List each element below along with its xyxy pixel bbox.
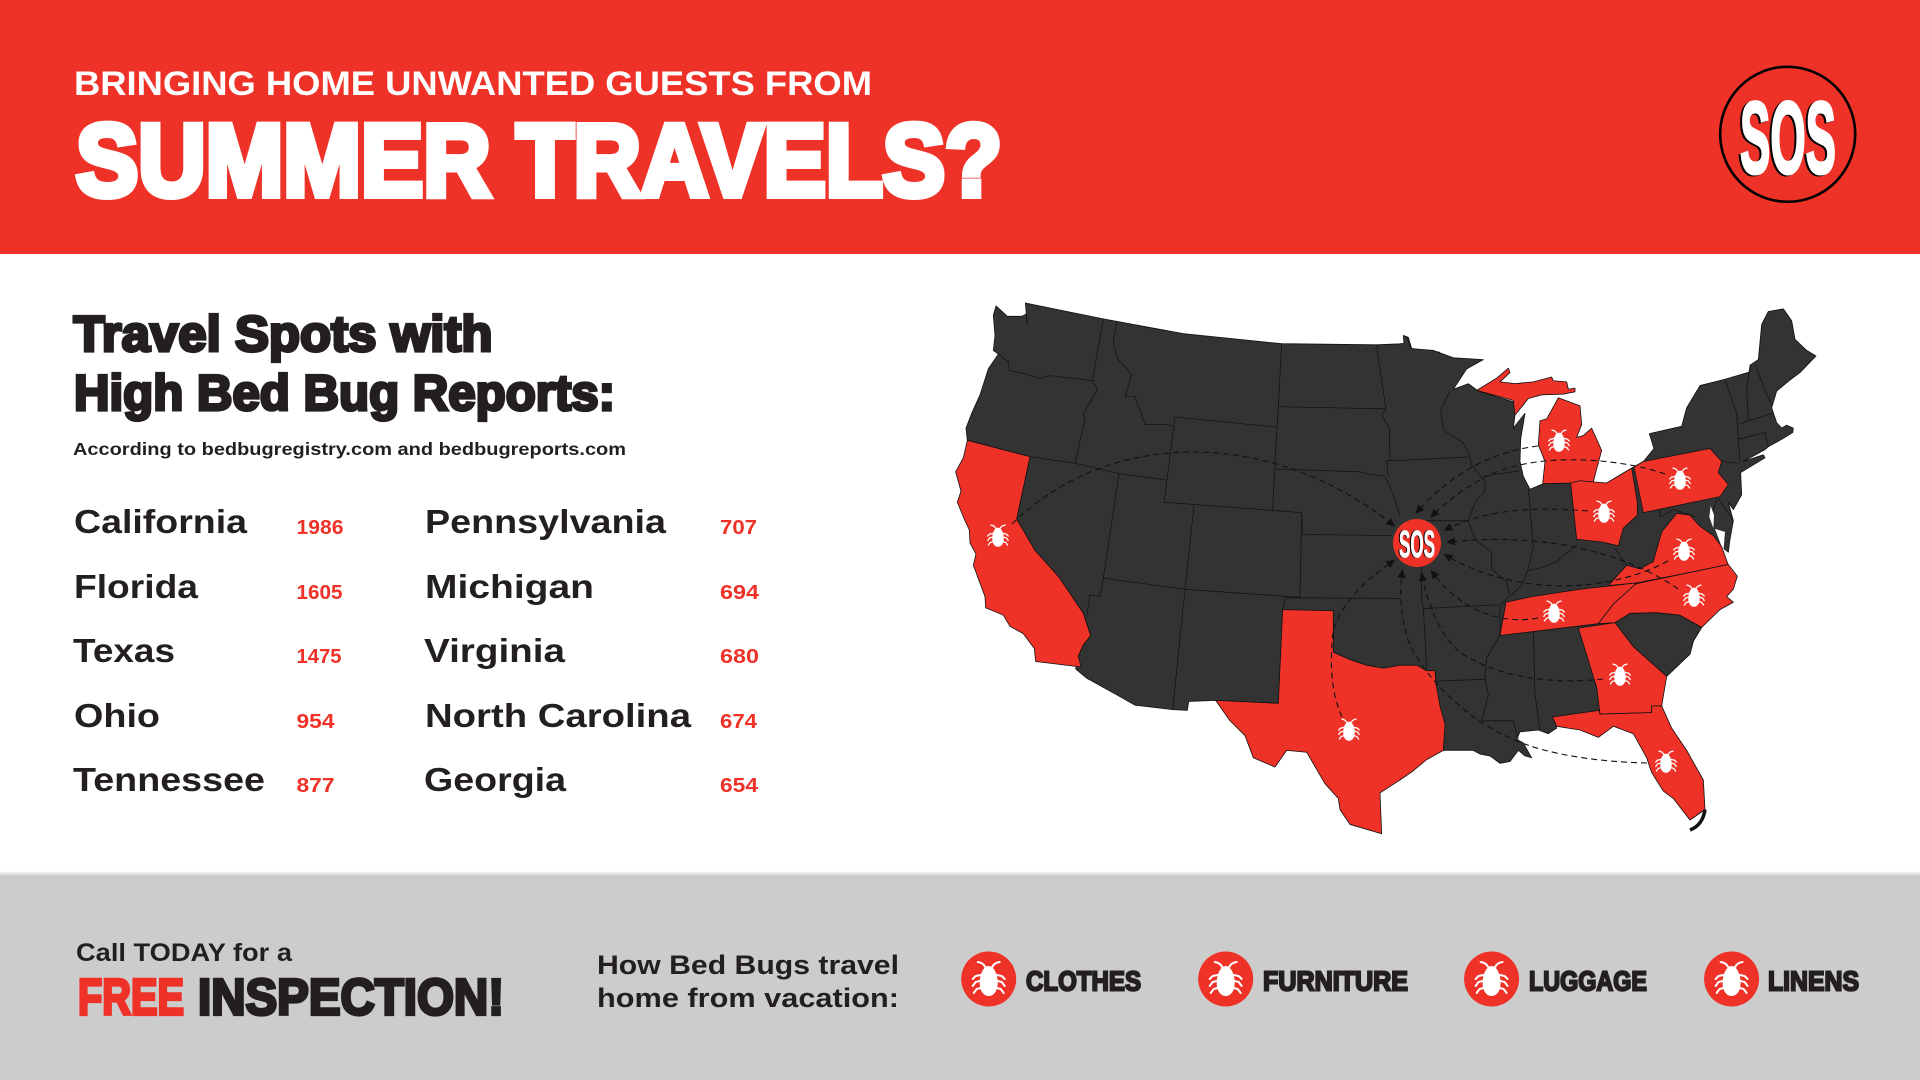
state ranking list: right column: Georgia	[424, 761, 567, 798]
call to action: INSPECTION!	[198, 968, 504, 1026]
how bed bugs travel label: How Bed Bugs travel	[597, 950, 899, 980]
state ranking list: left column: California	[74, 503, 248, 540]
state ranking list: right column: 654	[720, 775, 759, 797]
state: Tennessee	[1500, 583, 1636, 636]
how bed bugs travel label	[597, 950, 899, 1013]
legend item: furniture: FURNITURE	[1263, 966, 1408, 996]
legend item: luggage: LUGGAGE	[1529, 966, 1647, 996]
state: Georgia	[1578, 623, 1667, 714]
state ranking list: left column: 954	[296, 711, 335, 733]
state ranking list: right column: Michigan	[425, 568, 594, 605]
legend item: linens	[1704, 952, 1859, 1006]
state ranking list: right column: Virginia	[424, 632, 566, 669]
section heading	[74, 306, 615, 421]
highlighted western states	[956, 440, 1445, 834]
western states shapes	[966, 303, 1440, 710]
state ranking list: left column: Texas	[73, 632, 175, 669]
state: Michigan lower peninsula	[1538, 398, 1602, 484]
header kicker text: BRINGING HOME UNWANTED GUESTS FROM	[74, 65, 872, 103]
state ranking list: left column: 877	[296, 775, 334, 797]
how bed bugs travel label: home from vacation:	[597, 983, 899, 1013]
state: North Carolina	[1598, 564, 1737, 627]
state ranking list: left column: Florida	[74, 568, 199, 605]
legend item: furniture	[1198, 952, 1408, 1006]
state: Virginia	[1608, 513, 1728, 586]
state ranking list: right column: 694	[720, 582, 760, 604]
state ranking list: left column: Tennessee	[73, 761, 265, 798]
legend item: linens: LINENS	[1768, 966, 1859, 996]
state: Michigan upper peninsula	[1477, 368, 1575, 415]
source note: According to bedbugregistry.com and bedbugreports.com	[73, 439, 626, 459]
SOS logo	[1720, 67, 1855, 202]
footer shadow	[0, 871, 1920, 877]
legend item: clothes: CLOTHES	[1026, 966, 1141, 996]
state ranking list: right column: Pennsylvania	[425, 503, 667, 540]
call to action: Call TODAY for a	[76, 939, 293, 967]
legend item: clothes	[961, 952, 1141, 1006]
call to action: FREE	[78, 968, 184, 1026]
state ranking list: right column: North Carolina	[425, 697, 692, 734]
state: Pennsylvania	[1634, 449, 1728, 513]
state ranking list: left column	[73, 503, 344, 798]
state ranking list: left column: 1475	[296, 646, 342, 668]
main title: SUMMER TRAVELS?	[76, 104, 1002, 218]
state ranking list: left column: 1605	[296, 582, 342, 604]
state ranking list: right column	[424, 503, 760, 798]
state ranking list: left column: 1986	[296, 517, 344, 539]
bug markers on highlighted states	[988, 430, 1704, 773]
legend item: luggage	[1464, 952, 1647, 1006]
state ranking list: right column: 707	[720, 517, 757, 539]
state ranking list: left column: Ohio	[74, 697, 160, 734]
Florida keys stroke	[1690, 810, 1705, 830]
highlighted eastern states	[1477, 368, 1737, 830]
SOS map hub: SOS	[1399, 524, 1435, 566]
section heading: High Bed Bug Reports:	[74, 365, 615, 421]
state: California	[956, 440, 1091, 667]
SOS map hub	[1393, 519, 1441, 567]
state: Ohio	[1571, 468, 1637, 546]
eastern states shapes	[1400, 309, 1816, 763]
footer band	[0, 877, 1920, 1080]
call to action	[76, 939, 504, 1026]
Chesapeake Bay water	[1709, 506, 1725, 552]
US map	[956, 303, 1816, 834]
state: Texas	[1216, 610, 1445, 834]
state ranking list: right column: 680	[720, 646, 759, 668]
state: Florida	[1552, 706, 1705, 820]
state: South Carolina	[1615, 613, 1702, 676]
dashed travel routes	[1012, 446, 1678, 763]
section heading: Travel Spots with	[74, 306, 493, 362]
state ranking list: right column: 674	[720, 711, 758, 733]
header band	[0, 0, 1920, 254]
